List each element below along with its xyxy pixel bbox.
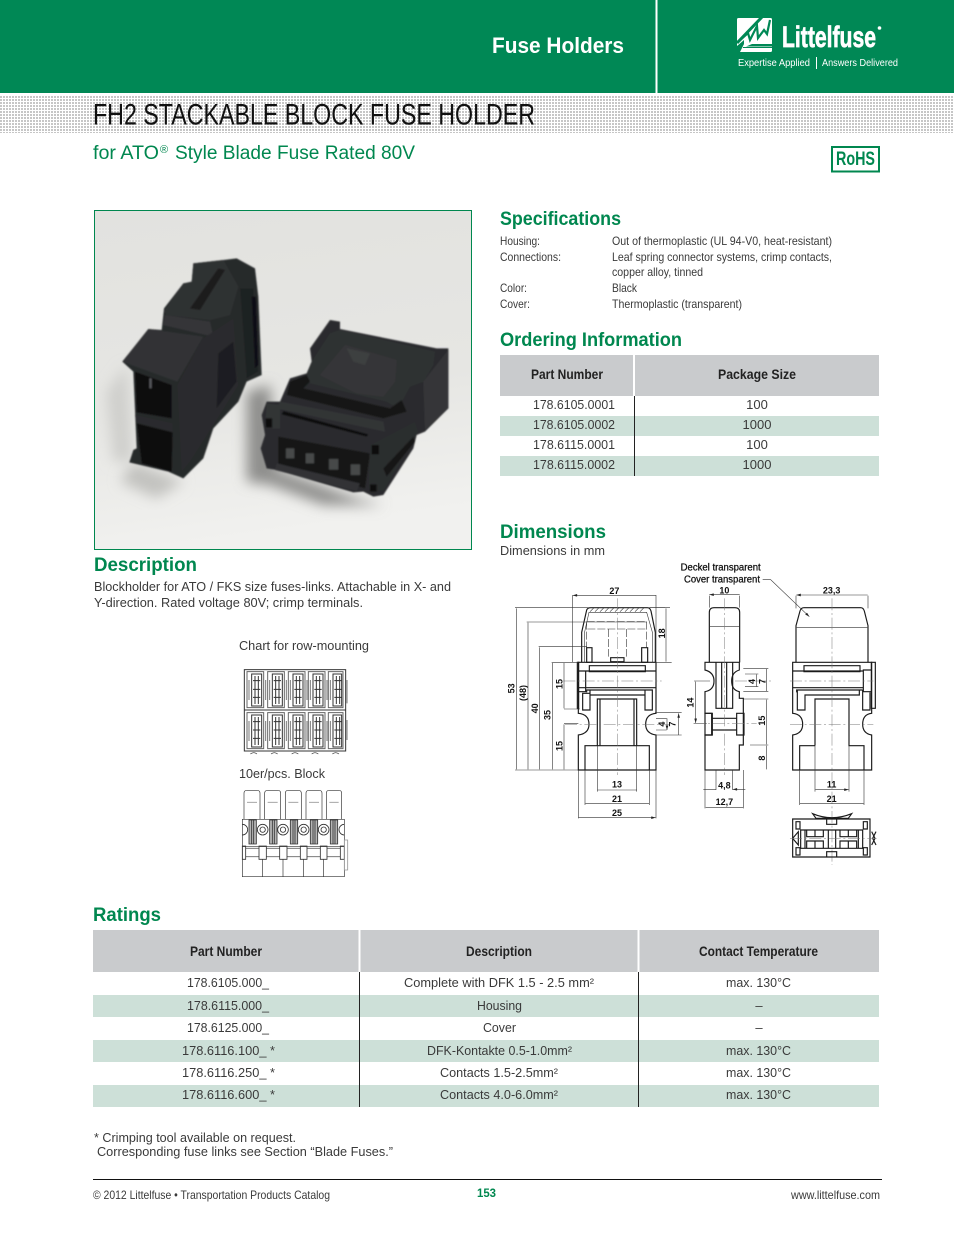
table: ordering information: 178.6105.0002 (533, 417, 615, 432)
specifications list: Thermoplastic (transparent) (612, 297, 742, 311)
front view: 18 (657, 628, 667, 638)
table: ratings: Part Number (190, 943, 262, 959)
front view: 35 (542, 710, 552, 720)
front view: 15 (555, 741, 565, 751)
rear view: 23,3 (823, 586, 840, 596)
rear view: 21 (827, 794, 837, 804)
table: ratings: 178.6125.000_ (187, 1020, 270, 1035)
side view: 10 (719, 586, 729, 596)
side view: 14 (685, 698, 695, 708)
side view: 15 (757, 716, 767, 726)
title: FH2 STACKABLE BLOCK FUSE HOLDER (93, 98, 535, 132)
photo shadows (247, 385, 383, 505)
heading: ratings: Ratings (93, 905, 161, 926)
table: ordering information (500, 355, 879, 476)
front view: 7 (668, 722, 678, 727)
footer: www.littelfuse.com (790, 1188, 880, 1202)
right holder (261, 320, 448, 497)
table: ordering information: Part Number (531, 366, 603, 382)
footer: © 2012 Littelfuse • Transportation Products Catalog (93, 1188, 330, 1202)
description text: Blockholder for ATO / FKS size fuses-links. Attachable in X- and (94, 579, 451, 594)
chart caption: Chart for row-mounting (239, 638, 369, 653)
dimensions note: Dimensions in mm (500, 543, 605, 558)
table: ratings: 178.6116.600_ * (182, 1087, 275, 1102)
footnote: * Crimping tool available on request. (94, 1130, 296, 1145)
table: ratings (93, 930, 879, 1107)
table: ratings: max. 130°C (726, 975, 791, 990)
rear view: 11 (827, 780, 836, 790)
table: ratings: Complete with DFK 1.5 - 2.5 mm² (404, 975, 595, 990)
subtitle: ® (160, 144, 168, 156)
diagram: 10-piece block (242, 790, 348, 877)
side view: 4,8 (718, 780, 731, 790)
RoHS badge: RoHS (836, 149, 875, 170)
specifications list: Black (612, 281, 638, 295)
left holder (122, 258, 262, 478)
footnote (94, 1130, 393, 1159)
footer: 153 (477, 1186, 496, 1200)
description text: Y-direction. Rated voltage 80V; crimp terminals. (94, 595, 363, 610)
front view: 21 (612, 794, 622, 804)
table: ratings: Contact Temperature (699, 943, 818, 959)
specifications list: Connections: (500, 250, 561, 264)
table: ordering information: 178.6115.0001 (533, 437, 615, 452)
footer (93, 1179, 882, 1202)
table: ratings: – (755, 998, 763, 1013)
specifications list: Out of thermoplastic (UL 94-V0, heat-resistant) (612, 234, 832, 248)
table: ordering information: 1000 (743, 457, 771, 472)
table: ordering information: 178.6105.0001 (533, 397, 615, 412)
side view: 8 (757, 756, 767, 761)
rear view (790, 586, 875, 865)
table: ordering information: Package Size (718, 366, 796, 382)
Littelfuse logo: Answers Delivered (822, 58, 898, 69)
heading: dimensions: Dimensions (500, 522, 606, 543)
front view: 25 (612, 808, 622, 818)
table: ratings: max. 130°C (726, 1043, 791, 1058)
chart caption: block: 10er/pcs. Block (239, 766, 325, 781)
callout: cover transparent: Cover transparent (684, 574, 760, 585)
panel: product photo (94, 210, 472, 550)
table: ratings: max. 130°C (726, 1065, 791, 1080)
front view: (48) (518, 685, 528, 701)
front view: 40 (530, 703, 540, 713)
header band (0, 0, 954, 93)
RoHS badge (832, 147, 879, 172)
specifications list (500, 234, 832, 311)
table: ratings: 178.6105.000_ (187, 975, 270, 990)
specifications list: Color: (500, 281, 527, 295)
subtitle: for ATO (93, 143, 159, 164)
side view (685, 586, 773, 808)
specifications list: Leaf spring connector systems, crimp contacts, (612, 250, 832, 264)
subtitle: Style Blade Fuse Rated 80V (175, 143, 415, 164)
heading: ordering information: Ordering Information (500, 330, 682, 351)
front view: 53 (506, 683, 516, 693)
Littelfuse logo: Expertise Applied (738, 58, 810, 69)
footnote: Corresponding fuse links see Section “Blade Fuses.” (97, 1144, 393, 1159)
specifications list: Housing: (500, 234, 540, 248)
callout: cover transparent: Deckel transparent (681, 562, 761, 573)
table: ratings: Cover (483, 1020, 517, 1035)
Littelfuse logo (737, 17, 898, 69)
front view: 13 (612, 780, 622, 790)
dotted title band (0, 96, 954, 133)
table: ordering information: 1000 (743, 417, 771, 432)
side view: 4 (747, 679, 757, 684)
diagram: row-mounting chart (244, 670, 347, 754)
table: ordering information: 100 (746, 437, 768, 452)
table: ratings: Contacts 4.0-6.0mm² (440, 1087, 559, 1102)
table: ratings: 178.6115.000_ (187, 998, 270, 1013)
table: ordering information: 178.6115.0002 (533, 457, 615, 472)
top view (790, 814, 877, 857)
specifications list: Cover: (500, 297, 530, 311)
front view: 15 (555, 679, 565, 689)
table: ratings: 178.6116.250_ * (182, 1065, 275, 1080)
side view: 12,7 (716, 797, 733, 807)
table: ratings: DFK-Kontakte 0.5-1.0mm² (427, 1043, 573, 1058)
heading: specifications: Specifications (500, 209, 621, 230)
table: ordering information: 100 (746, 397, 768, 412)
heading: description: Description (94, 555, 197, 576)
table: ratings: max. 130°C (726, 1087, 791, 1102)
technical drawing: dimensions (506, 562, 877, 865)
specifications list: copper alloy, tinned (612, 265, 703, 279)
callout: cover transparent (681, 562, 809, 617)
front view (506, 586, 682, 818)
front view: 27 (609, 586, 619, 596)
table: ratings: – (755, 1020, 763, 1035)
Littelfuse logo: Littelfuse (782, 21, 876, 54)
side view: 7 (757, 679, 767, 684)
table: ratings: Description (466, 943, 532, 959)
table: ratings: 178.6116.100_ * (182, 1043, 275, 1058)
front view: 4 (657, 722, 667, 727)
table: ratings: Housing (477, 998, 522, 1013)
table: ratings: Contacts 1.5-2.5mm² (440, 1065, 559, 1080)
section name: Fuse Holders (492, 33, 624, 58)
description text (94, 579, 451, 610)
